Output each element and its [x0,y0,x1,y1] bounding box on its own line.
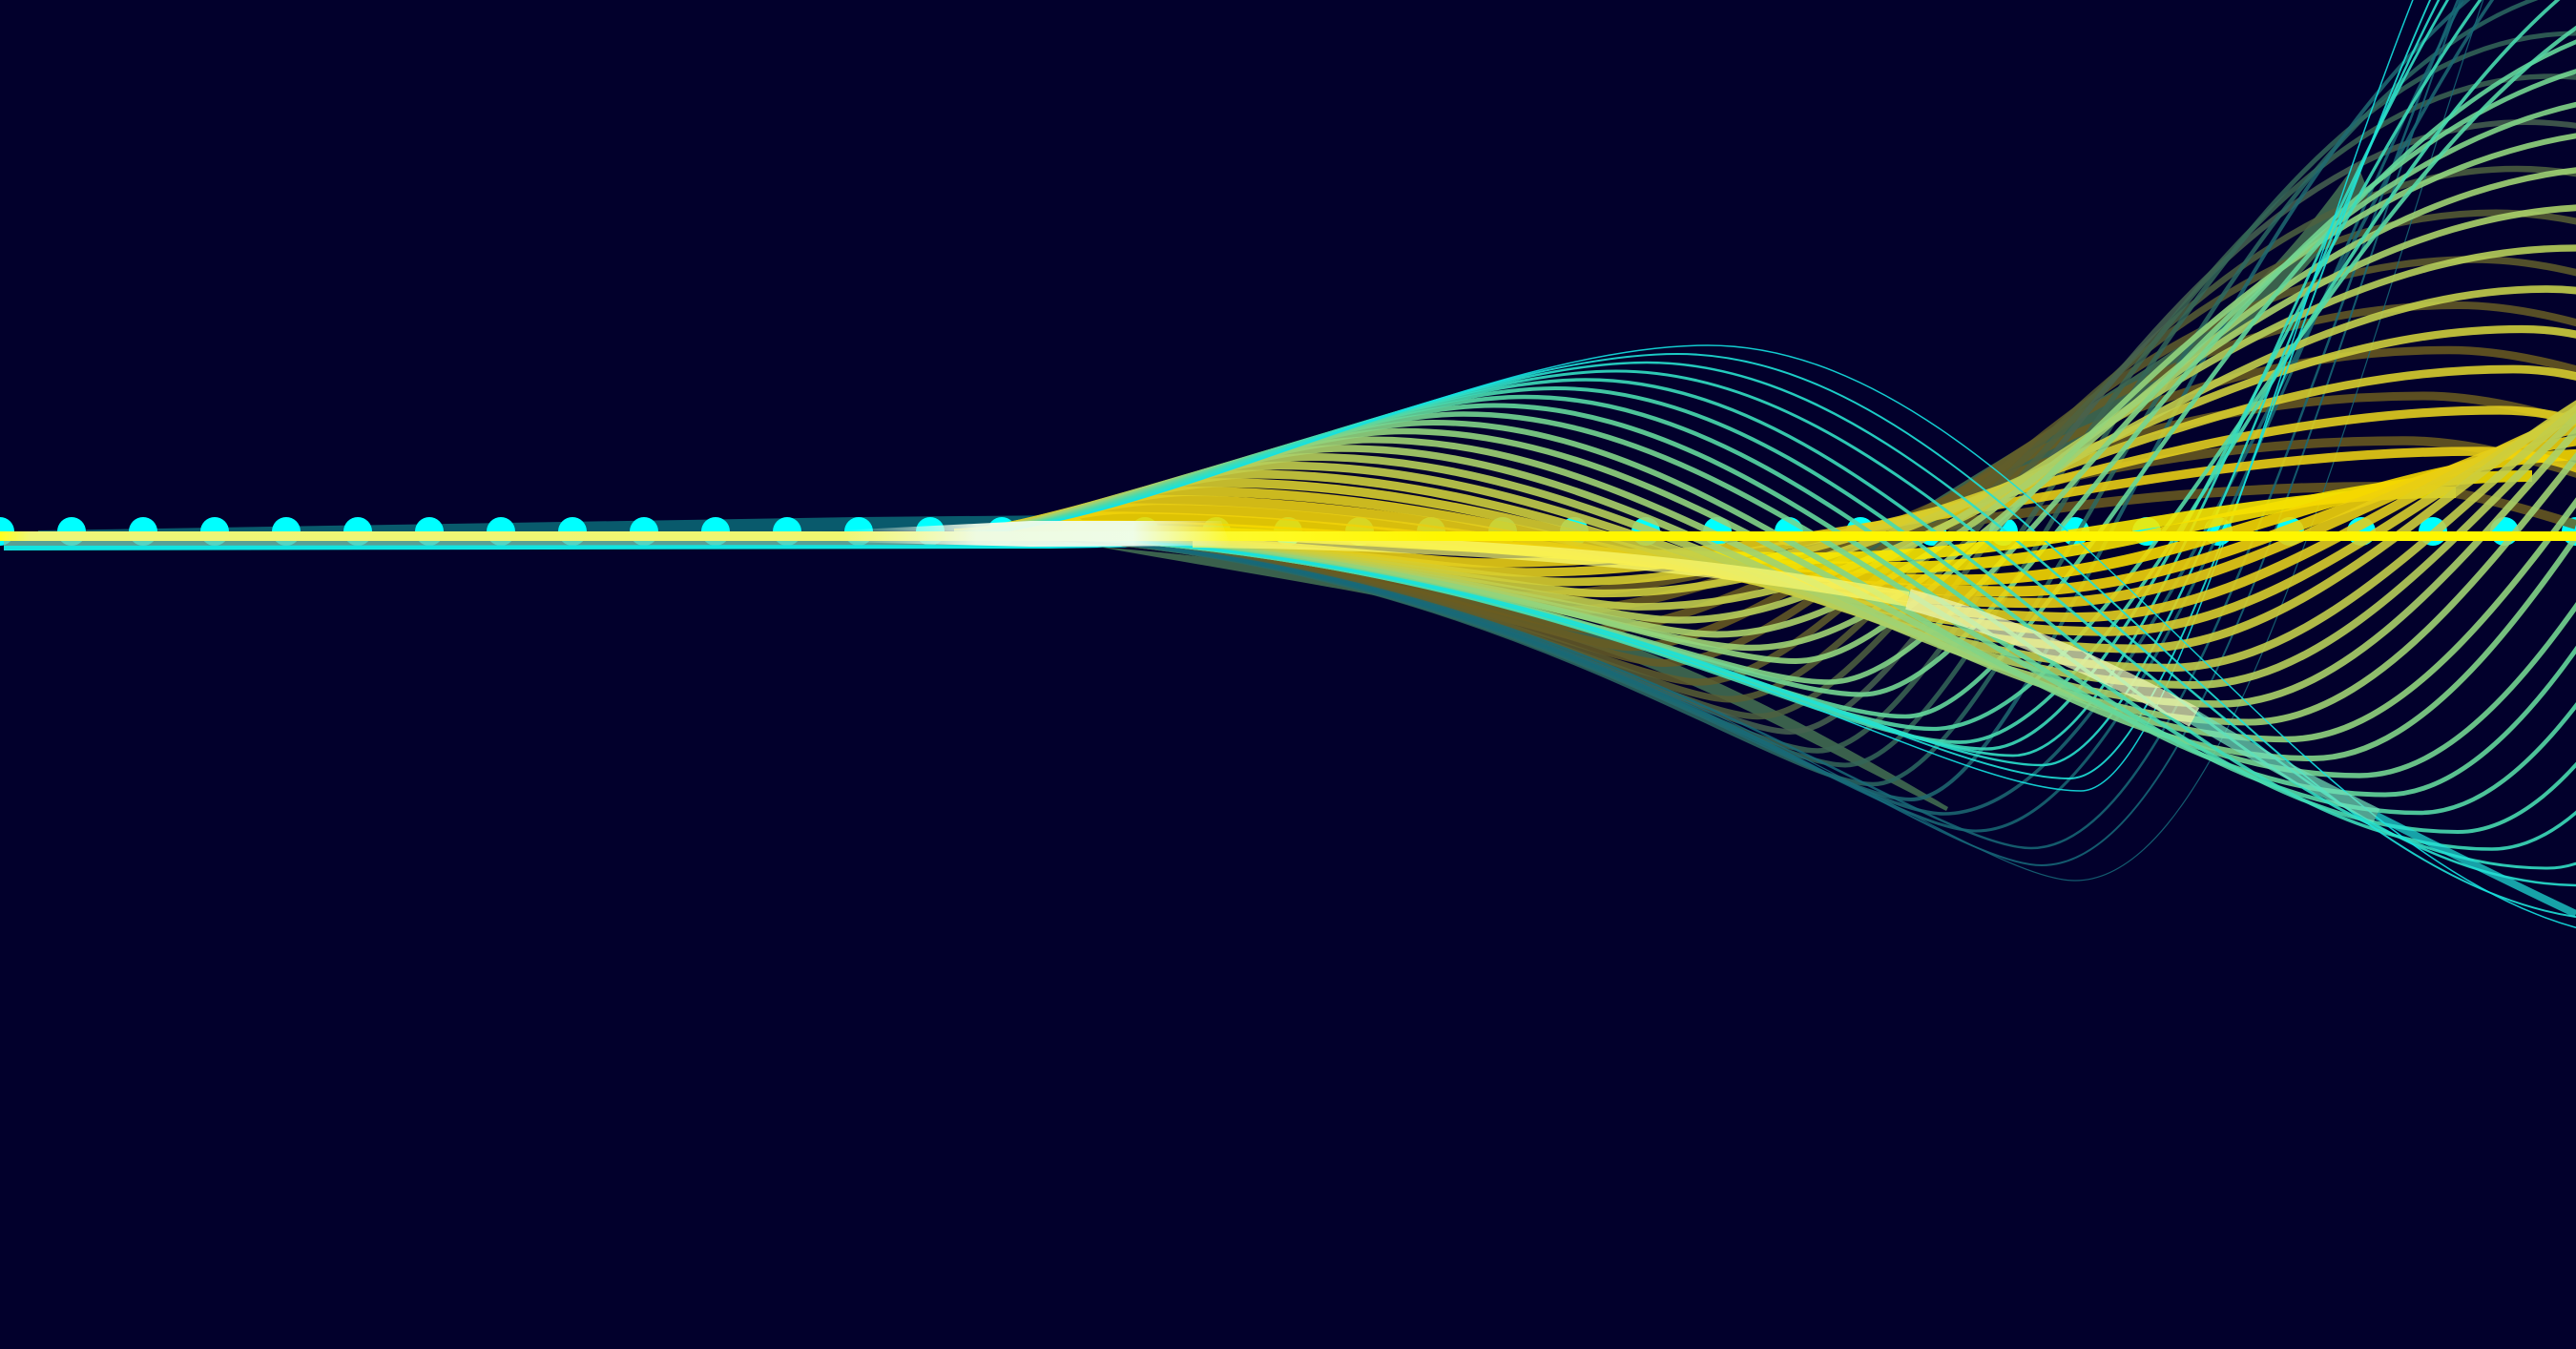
white glow where the curves converge [840,521,1231,547]
dark teal band above the axis [38,515,1069,534]
dark upper envelope band [1860,162,2368,558]
bright cyan band below the axis [4,544,1221,550]
pale bright band along the descending envelope [1193,540,2576,914]
bright steep wave family [954,0,2576,791]
main horizontal yellow line [0,531,2576,541]
row of cyan dots along the axis [0,517,2576,546]
dark lower envelope band [1097,547,1948,811]
grey-cyan band below the axis [4,541,1221,546]
bright crest wave family [954,0,2576,940]
dark wave family [954,0,2576,881]
